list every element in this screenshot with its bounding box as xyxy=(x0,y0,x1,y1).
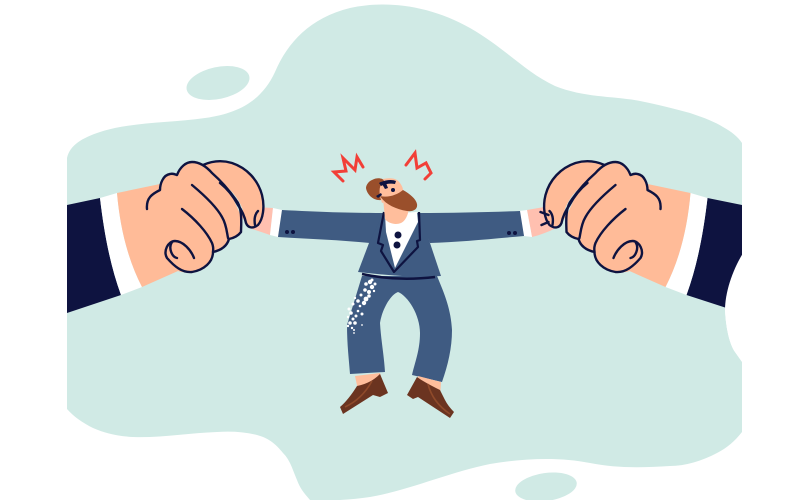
left arm and fist xyxy=(67,161,264,313)
white notch on right edge xyxy=(725,250,745,366)
left ankle and shoe xyxy=(340,373,388,414)
sleeve xyxy=(67,198,121,313)
fist outline xyxy=(147,161,263,272)
shock mark left xyxy=(334,157,363,181)
jacket hem line xyxy=(362,274,435,279)
glasses and eyes xyxy=(376,180,396,198)
jacket xyxy=(358,212,441,279)
shock mark right xyxy=(406,153,431,179)
beard xyxy=(380,190,417,211)
shirt cuff xyxy=(666,193,708,295)
gap between thumb and fingers xyxy=(564,188,580,214)
hair xyxy=(366,178,384,200)
fist outline xyxy=(540,161,661,272)
neck xyxy=(383,198,409,224)
head xyxy=(366,178,417,224)
shirt cuff xyxy=(100,193,142,295)
small blob top xyxy=(183,61,253,105)
small blob bottom xyxy=(513,469,579,500)
fist xyxy=(117,161,264,287)
gap between thumb and fingers xyxy=(228,188,243,214)
sleeve xyxy=(686,198,742,313)
worn patch on trousers xyxy=(347,278,376,334)
man's left arm with cuff and wrist xyxy=(252,207,386,243)
trousers xyxy=(347,276,452,382)
shirt buttons xyxy=(394,232,402,248)
lapels xyxy=(378,212,420,272)
fist xyxy=(543,161,690,287)
face xyxy=(376,178,403,203)
right ankle and shoe xyxy=(407,376,454,418)
man's right arm with cuff and wrist xyxy=(418,206,556,243)
right arm and fist xyxy=(540,161,742,313)
shirt xyxy=(385,212,418,268)
